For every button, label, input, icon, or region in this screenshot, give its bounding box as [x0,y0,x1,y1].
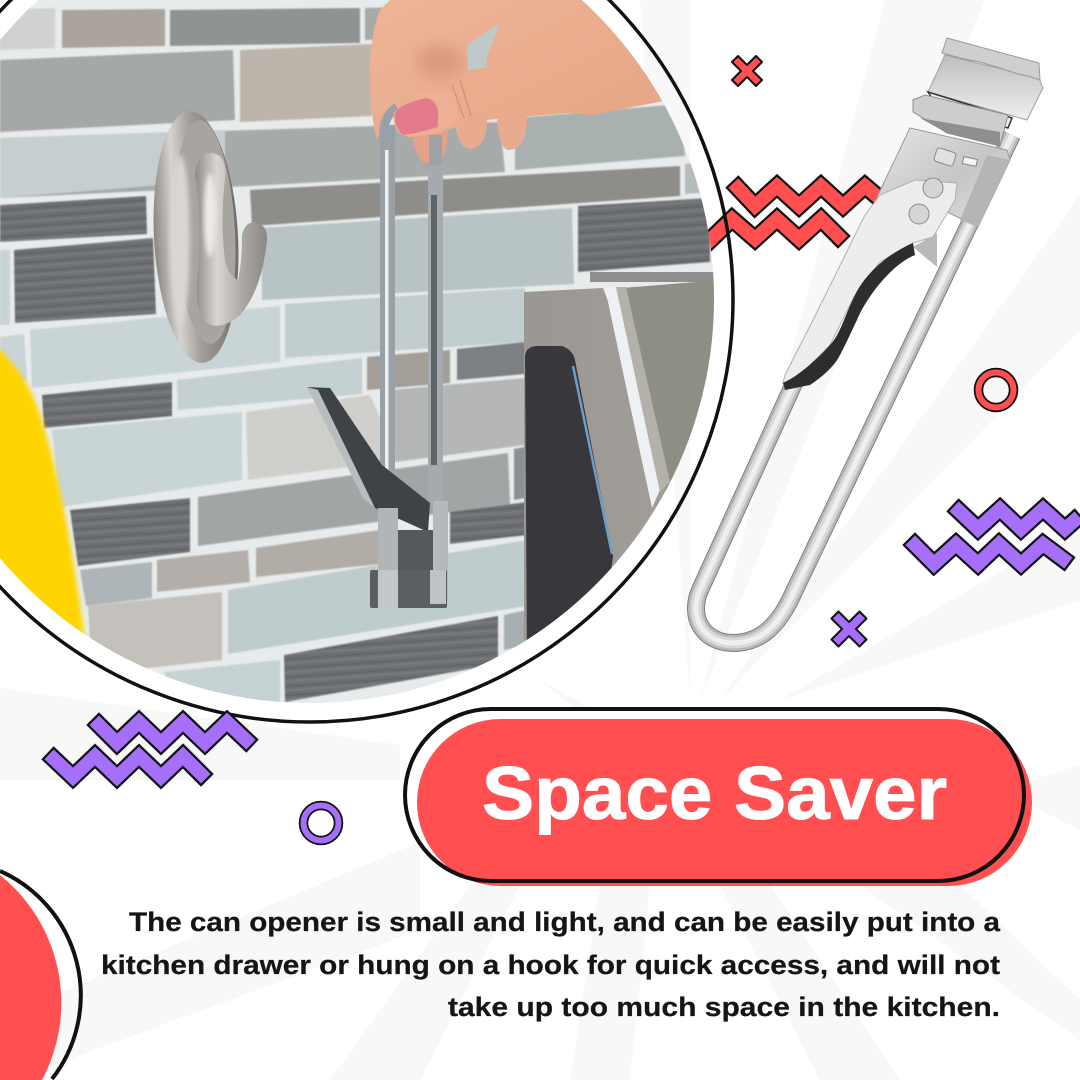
red cross icon [732,56,762,86]
heading pill [405,709,1032,886]
opener lever [783,180,957,383]
opener wire loop [696,135,1012,643]
description text [101,907,1000,1022]
photo circle outline [0,0,733,722]
red zigzag decoration [704,186,885,246]
heading: Space Saver [482,751,947,835]
product: can opener [696,38,1043,643]
red ring icon [978,372,1014,408]
opener body [877,128,1010,227]
can opener held in hand [307,125,448,608]
purple zigzag right [915,509,1074,564]
cutter plate [928,55,1043,120]
purple cross icon [832,612,866,646]
description text: kitchen drawer or hung on a hook for quick access, and will not [101,950,1000,980]
hand [370,0,668,165]
tile wall [0,0,712,705]
wall hook [147,109,267,365]
yellow blurred object [0,340,85,640]
stainless appliance [524,272,714,642]
kitchen photo in circle [0,0,730,720]
purple zigzag left [54,722,246,777]
purple ring icon [304,806,338,840]
description text: take up too much space in the kitchen. [448,992,1000,1022]
bottom left red circle [0,871,81,1080]
description text: The can opener is small and light, and can be easily put into a [129,907,1000,937]
